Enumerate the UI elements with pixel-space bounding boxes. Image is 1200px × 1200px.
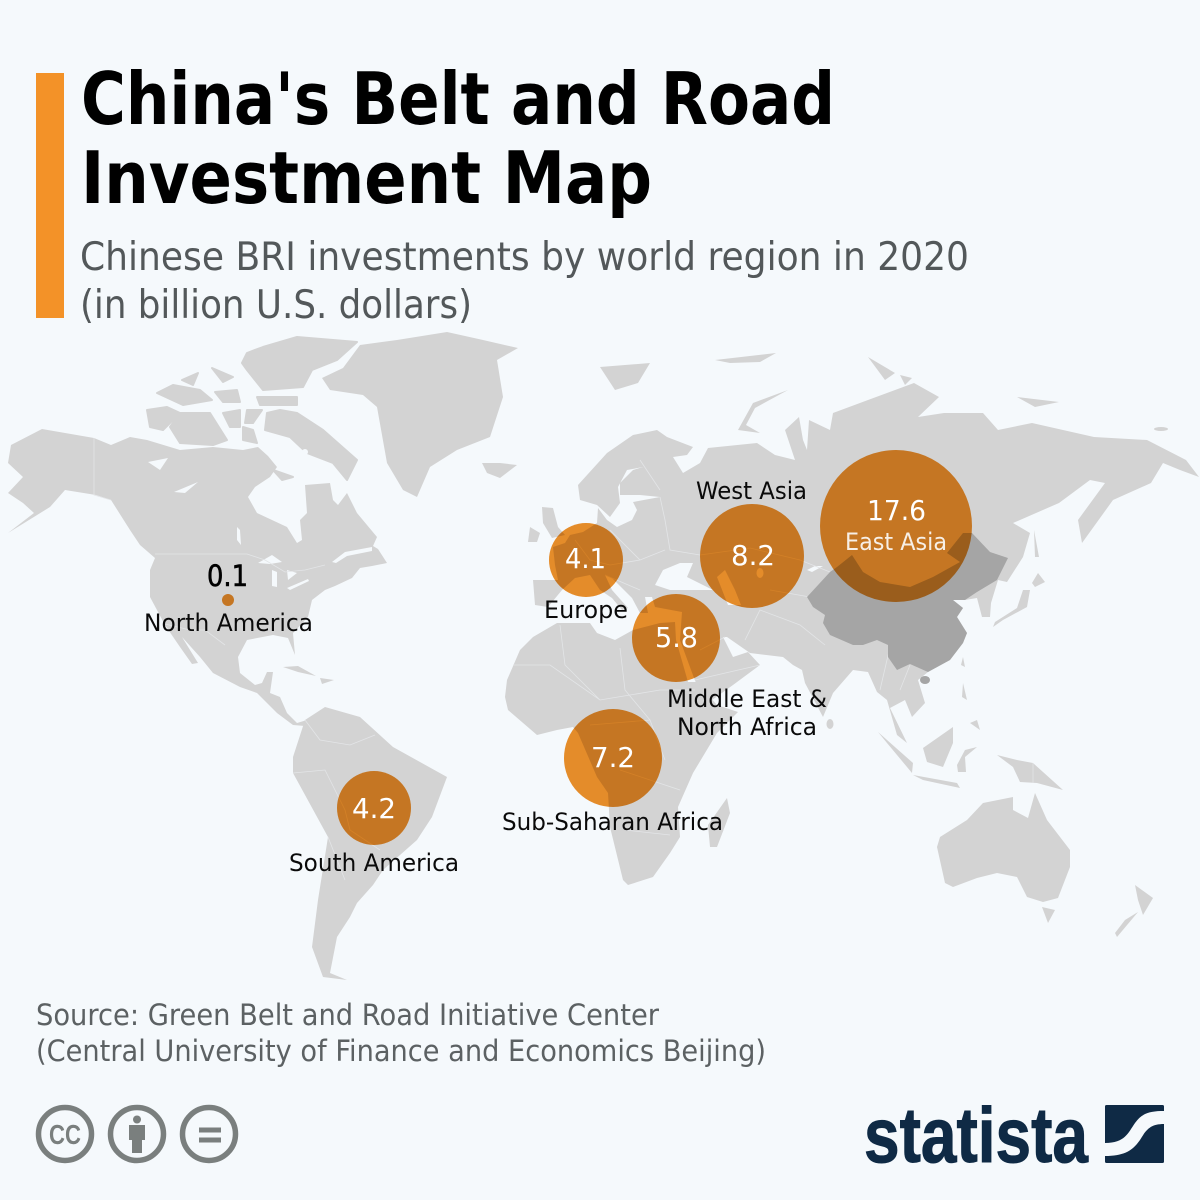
bubble: North America bbox=[222, 594, 234, 606]
label: Sub-Saharan Africa bbox=[502, 741, 723, 836]
title: Investment Map bbox=[81, 136, 652, 220]
landmass: Madagascar bbox=[708, 798, 730, 847]
label: East Asia: East Asia bbox=[845, 528, 947, 556]
landmass: Caribbean islands bbox=[283, 666, 334, 684]
landmass: Arctic Canada islands bbox=[147, 337, 357, 480]
label: North America: North America bbox=[144, 609, 313, 637]
label: Middle East and North Africa bbox=[655, 621, 827, 741]
label: Europe: 4.1 bbox=[565, 542, 606, 575]
source note: Source: Green Belt and Road Initiative Center bbox=[36, 998, 659, 1032]
landmass: South America bbox=[293, 707, 447, 980]
bubble: South America bbox=[337, 771, 411, 845]
label: South America: 4.2 bbox=[352, 792, 396, 825]
bubble: Europe bbox=[549, 523, 623, 597]
label: Middle East and North Africa: 5.8 bbox=[655, 621, 698, 654]
accent bar bbox=[36, 73, 64, 318]
China highlighted bbox=[807, 533, 1008, 672]
label: Sub-Saharan Africa: 7.2 bbox=[591, 741, 635, 774]
landmass: Arctic Russia islands bbox=[600, 353, 1168, 433]
bubble: East Asia bbox=[820, 450, 972, 602]
icon: Hainan bbox=[920, 676, 930, 684]
landmass: North America bbox=[8, 429, 387, 726]
landmass: Australia and New Zealand bbox=[937, 793, 1153, 937]
label: Middle East and North Africa: North Africa bbox=[677, 713, 817, 741]
subtitle: Chinese BRI investments by world region in 2020 bbox=[80, 235, 969, 280]
inland seas and lakes bbox=[148, 449, 823, 605]
label: Sub-Saharan Africa: Sub-Saharan Africa bbox=[502, 808, 723, 836]
world map bbox=[8, 332, 1199, 980]
source note: (Central University of Finance and Economics Beijing) bbox=[36, 1034, 766, 1068]
title bbox=[81, 57, 835, 220]
label: South America bbox=[289, 792, 459, 877]
logo: statista wordmark: statista bbox=[864, 1091, 1088, 1179]
label: West Asia: 8.2 bbox=[731, 539, 775, 572]
title: China's Belt and Road bbox=[81, 57, 835, 141]
label: Europe: Europe bbox=[544, 596, 628, 624]
bubble: Sub-Saharan Africa bbox=[564, 709, 662, 807]
label: South America: South America bbox=[289, 849, 459, 877]
country borders bbox=[94, 438, 1033, 880]
bubble: Middle East and North Africa bbox=[632, 594, 720, 682]
label: West Asia: West Asia bbox=[696, 477, 807, 505]
logo: statista mark bbox=[1105, 1105, 1164, 1163]
icon: no derivatives bbox=[182, 1108, 236, 1160]
label: West Asia bbox=[696, 477, 807, 572]
icon: Creative Commons: CC bbox=[49, 1119, 81, 1150]
label: Middle East and North Africa: Middle East & bbox=[667, 685, 827, 713]
bubble: West Asia bbox=[700, 504, 804, 608]
label: North America: 0.1 bbox=[207, 559, 248, 593]
landmass: Greenland bbox=[322, 332, 518, 497]
icon: Creative Commons bbox=[38, 1108, 92, 1160]
label: East Asia bbox=[845, 494, 947, 556]
label: Europe bbox=[544, 542, 628, 624]
label: North America bbox=[144, 559, 313, 637]
landmass: Africa bbox=[505, 622, 738, 885]
landmass: Iceland, Britain, Ireland bbox=[482, 463, 565, 542]
source note bbox=[36, 998, 766, 1068]
icon: attribution bbox=[110, 1108, 164, 1160]
label: East Asia: 17.6 bbox=[867, 494, 926, 527]
landmass: Southeast Asia islands and Japan bbox=[826, 530, 1063, 790]
subtitle: (in billion U.S. dollars) bbox=[80, 283, 472, 328]
landmass: Eurasia bbox=[533, 383, 1199, 743]
subtitle bbox=[80, 235, 969, 328]
